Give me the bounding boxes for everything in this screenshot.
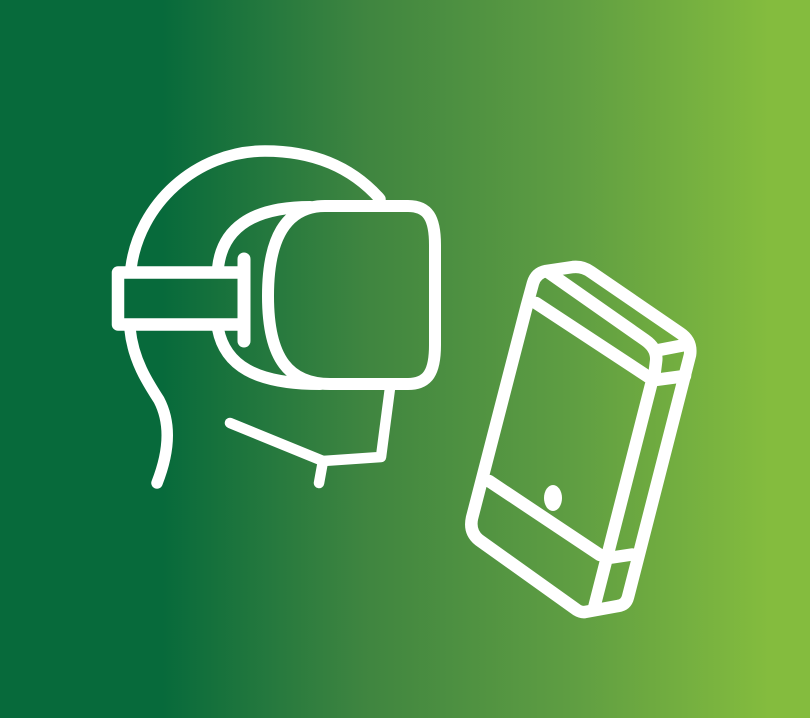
top bevel corner line <box>659 345 685 350</box>
lower screen edge <box>489 481 600 555</box>
fold between top bevel and screen bevel <box>548 272 656 378</box>
phone body <box>471 267 690 612</box>
strap <box>118 272 244 324</box>
icon: tilted smartphone <box>471 267 690 612</box>
icon: head profile wearing VR headset <box>118 151 435 483</box>
strap buckle <box>238 259 250 341</box>
right side connector <box>655 376 685 380</box>
home button <box>544 485 562 511</box>
bottom side connector <box>612 554 632 558</box>
neck curve <box>130 329 167 483</box>
chin and jaw <box>323 388 390 461</box>
headset rear shell <box>218 207 310 268</box>
headset front visor <box>268 206 435 384</box>
head outline back <box>131 151 380 268</box>
screen right edge <box>594 385 651 608</box>
upper screen edge <box>536 303 650 378</box>
